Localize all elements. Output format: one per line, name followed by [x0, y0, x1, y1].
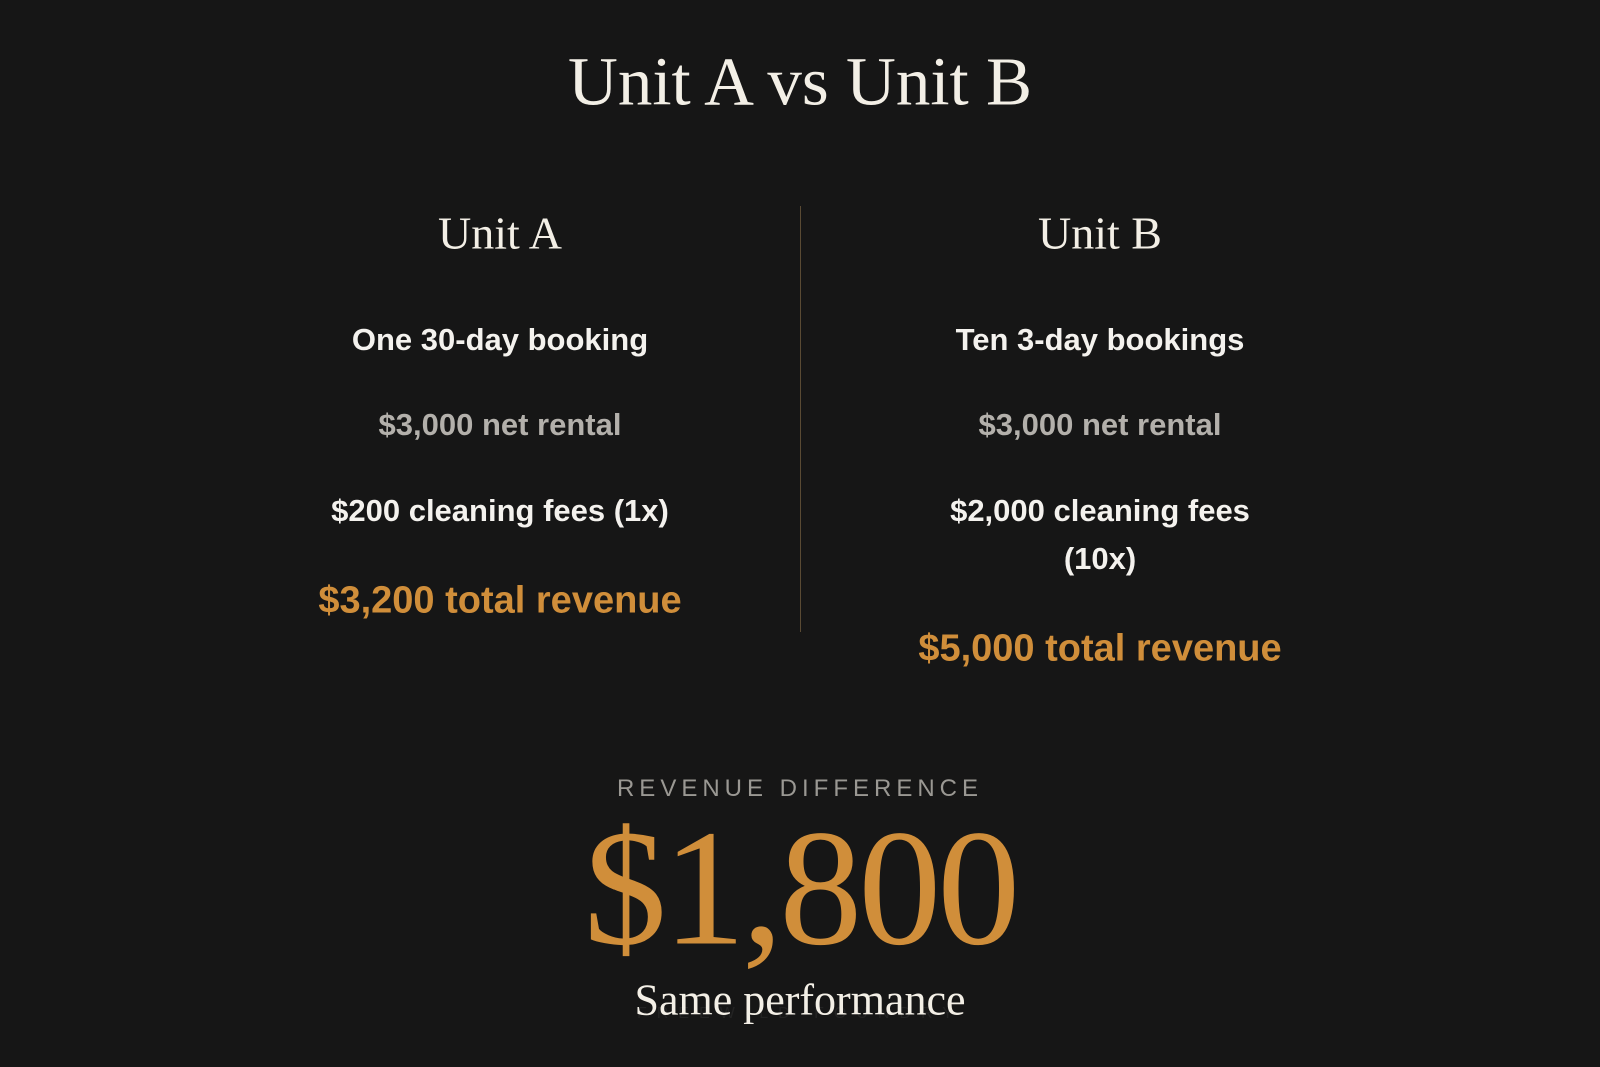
heading: unit B: Unit B	[1038, 208, 1162, 258]
text: booking: One 30-day booking	[352, 322, 648, 357]
panel: unit B	[918, 208, 1282, 670]
text: bookings: Ten 3-day bookings	[956, 322, 1244, 357]
text: total revenue: $3,200 total revenue	[318, 580, 682, 622]
text: cleaning fees	[950, 493, 1250, 576]
label: revenue difference: REVENUE DIFFERENCE	[617, 775, 983, 802]
text: cleaning fees: $200 cleaning fees (1x)	[331, 493, 669, 528]
text: total revenue: $5,000 total revenue	[918, 628, 1282, 670]
text: cleaning fees: (10x)	[1064, 541, 1136, 576]
watermark: FREEWILD FOUNDRY	[637, 1005, 963, 1022]
big number: $1,800	[584, 796, 1016, 980]
title: Unit A vs Unit B	[568, 44, 1032, 120]
subtitle: Same performance	[634, 976, 966, 1024]
heading: unit A: Unit A	[438, 208, 562, 258]
divider	[800, 206, 801, 632]
text: net rental: $3,000 net rental	[979, 407, 1221, 442]
panel: unit A	[318, 208, 682, 622]
text: cleaning fees: $2,000 cleaning fees	[950, 493, 1250, 528]
text: net rental: $3,000 net rental	[379, 407, 621, 442]
